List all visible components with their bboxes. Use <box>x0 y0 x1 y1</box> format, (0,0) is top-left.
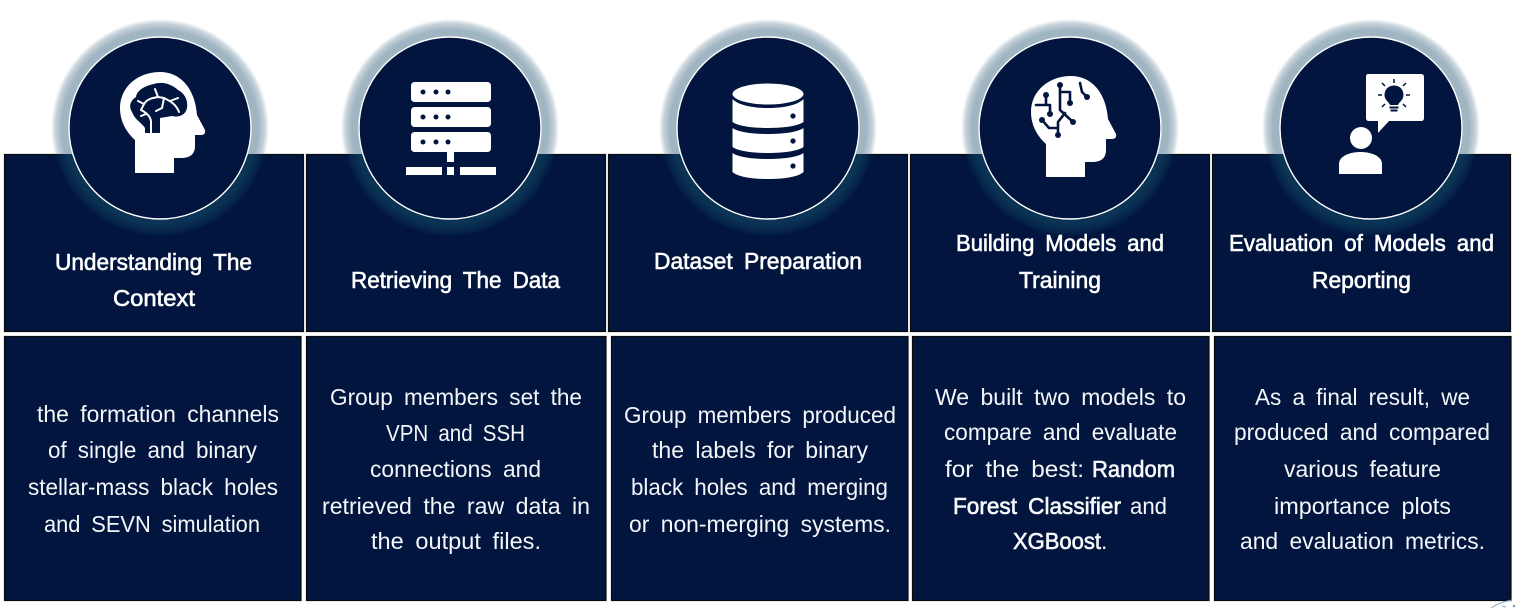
text block: step 5 description: importance plots <box>1274 493 1451 519</box>
text block: step 2 description: Group members set the <box>330 384 582 410</box>
heading: building models and training: Training <box>1019 267 1101 293</box>
text block: step 3 description: or non-merging systems. <box>629 511 891 537</box>
text block: step 4 description: Random <box>1092 456 1175 482</box>
step 5 circle with person and idea icon <box>1262 19 1480 237</box>
text block: step 2 description: connections and <box>370 456 541 482</box>
heading: understanding the context: Context <box>113 285 196 311</box>
text block: step 3 description: the labels for binary <box>652 437 868 463</box>
text block: step 5 description: As a final result, we <box>1255 384 1470 410</box>
step 3 circle with database icon <box>659 19 877 237</box>
step 2 circle with server icon <box>341 19 559 237</box>
heading: building models and training <box>956 230 1164 293</box>
step 1 circle with brain icon <box>51 19 269 237</box>
heading: evaluation of models and reporting: Evaluation of Models and <box>1229 230 1494 256</box>
text block: step 4 description: . <box>1101 528 1107 554</box>
text block: step 2 description: the output files. <box>371 528 541 554</box>
panel: top boxes <box>4 154 1510 332</box>
text block: step 1 description: stellar-mass black holes <box>28 474 278 500</box>
heading: retrieving the data: Retrieving The Data <box>351 267 560 293</box>
step 4 circle with circuit head icon <box>961 19 1179 237</box>
text block: step 4 description: compare and evaluate <box>944 419 1177 445</box>
text block: step 2 description <box>322 384 590 554</box>
text block: step 1 description: the formation channels <box>37 401 279 427</box>
heading: dataset preparation: Dataset Preparation <box>654 248 862 274</box>
text block: step 5 description: various feature <box>1284 456 1441 482</box>
text block: step 4 description: We built two models to <box>935 384 1186 410</box>
text block: step 4 description: and <box>1130 493 1167 519</box>
text block: step 5 description: produced and compared <box>1234 419 1490 445</box>
heading: evaluation of models and reporting <box>1229 230 1494 293</box>
heading: evaluation of models and reporting: Reporting <box>1312 267 1411 293</box>
text block: step 1 description: of single and binary <box>48 437 257 463</box>
text block: step 2 description: VPN and SSH <box>386 420 525 446</box>
text block: step 5 description <box>1234 384 1490 554</box>
text block: step 4 description: for the best: <box>945 456 1084 482</box>
text block: step 3 description <box>624 402 896 537</box>
text block: step 2 description: retrieved the raw data in <box>322 493 590 519</box>
text block: step 4 description <box>935 384 1186 554</box>
text block: step 1 description: and SEVN simulation <box>44 511 260 537</box>
heading: building models and training: Building Models and <box>956 230 1164 256</box>
heading: understanding the context <box>55 249 252 311</box>
text block: step 3 description: black holes and merging <box>631 474 888 500</box>
text block: step 3 description: Group members produced <box>624 402 896 428</box>
text block: step 1 description <box>28 401 279 537</box>
heading: understanding the context: Understanding The <box>55 249 252 275</box>
text block: step 4 description: Forest Classifier <box>953 493 1121 519</box>
text block: step 5 description: and evaluation metrics. <box>1240 528 1485 554</box>
text block: step 4 description: XGBoost <box>1013 528 1102 554</box>
corner mark <box>1491 600 1515 608</box>
panel: bottom boxes <box>4 336 1511 600</box>
